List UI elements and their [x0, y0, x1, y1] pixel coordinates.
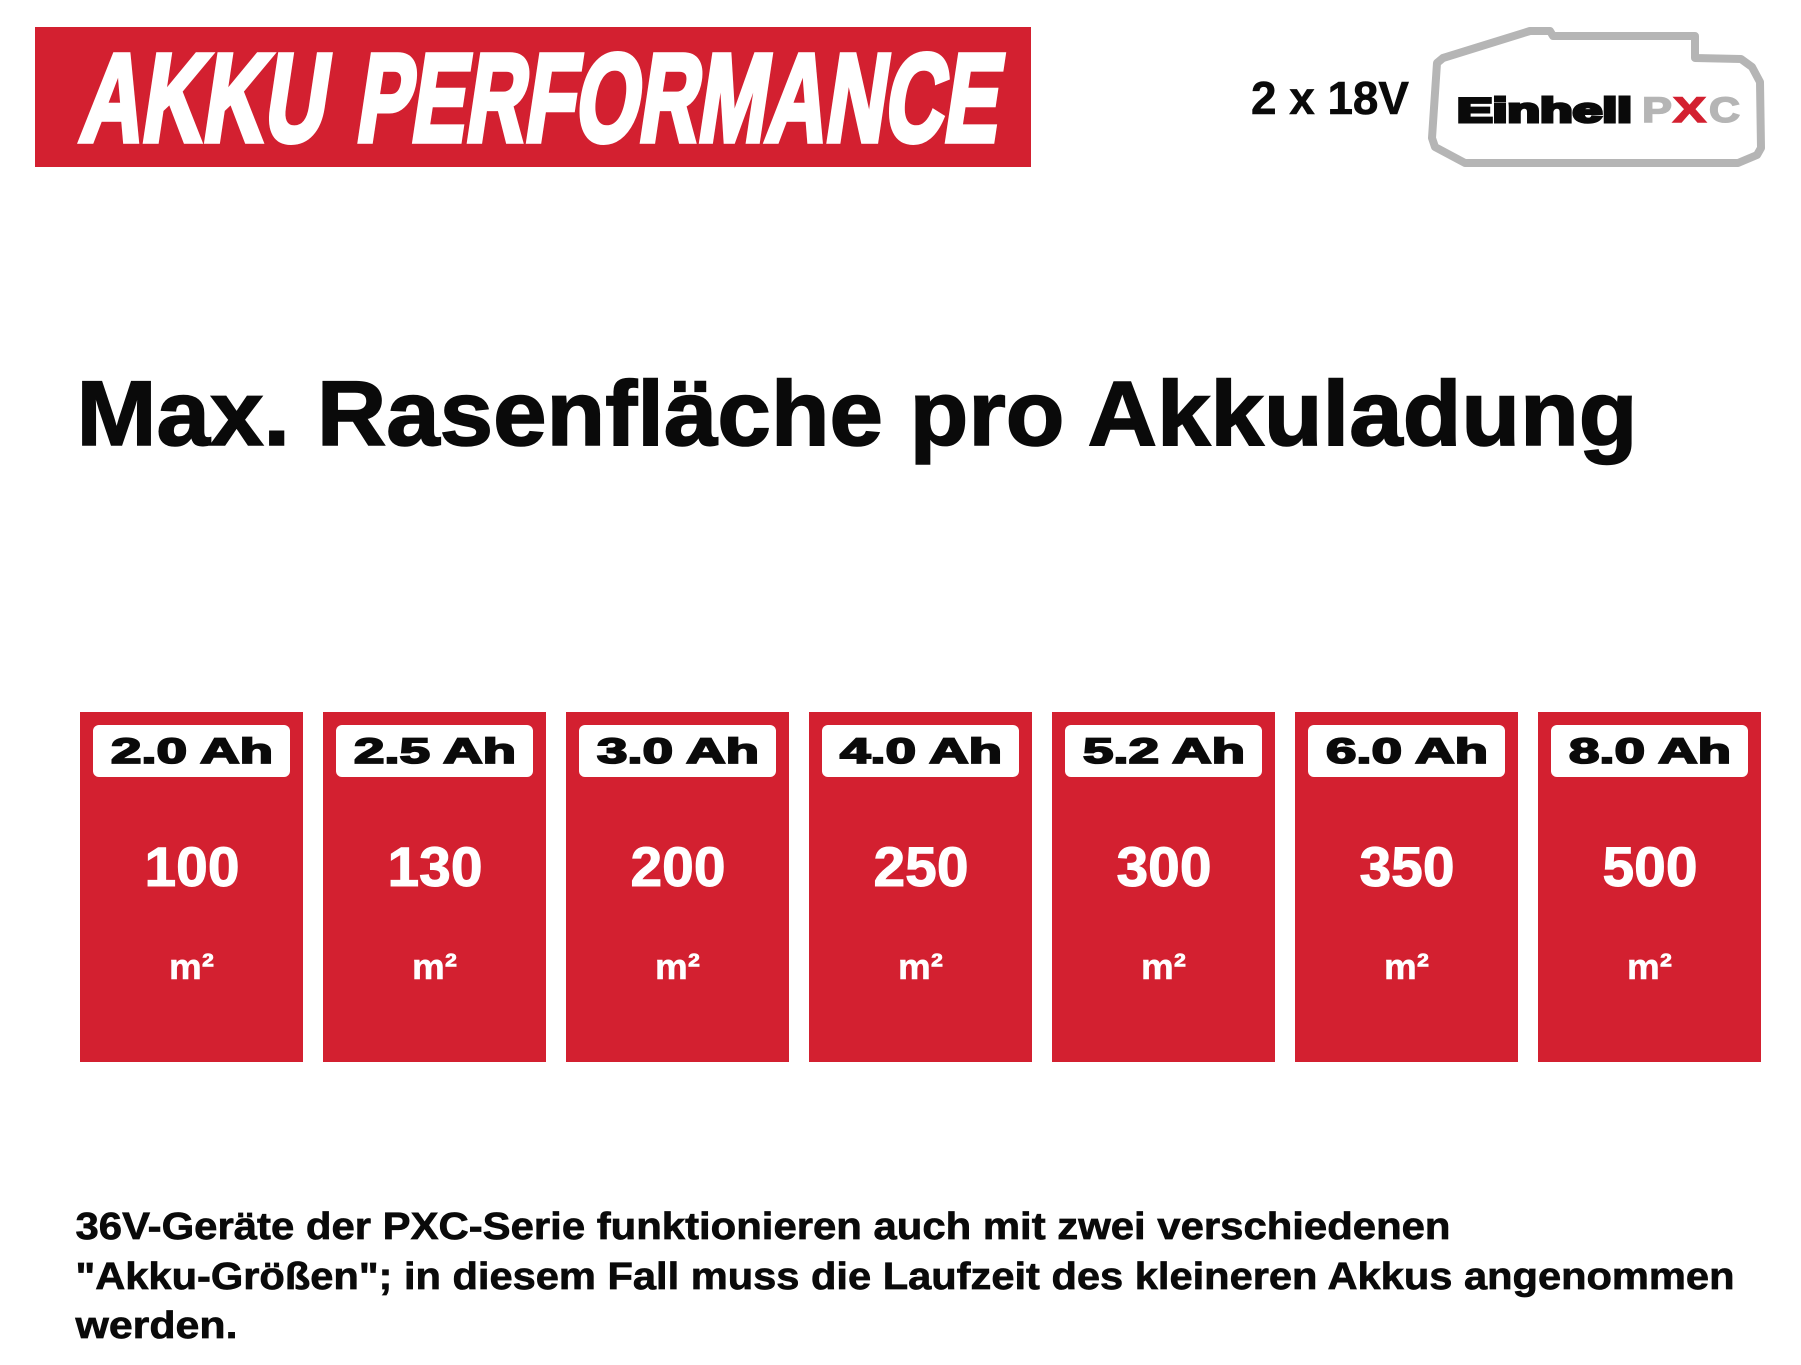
- voltage label: 2 x 18V: [1251, 72, 1409, 124]
- panel: battery cards: [80, 712, 1761, 1062]
- card: 3.0 Ah: 3.0 Ah: [597, 732, 759, 771]
- title banner: PERFORMANCE: [350, 28, 1013, 168]
- card: 2.5 Ah: 130: [388, 835, 482, 898]
- card: 8.0 Ah: 8.0 Ah: [1569, 732, 1731, 771]
- card: 2.0 Ah: 100: [144, 835, 240, 898]
- card: 6.0 Ah: 350: [1360, 835, 1454, 898]
- footnote text: 36V-Geräte der PXC-Serie funktionieren auch mit zwei verschiedenen: [76, 1206, 1450, 1248]
- icon: battery with Einhell PXC logo: C: [1709, 91, 1740, 130]
- card: 4.0 Ah: 250: [874, 835, 968, 898]
- title banner: [35, 27, 1031, 168]
- card: 8.0 Ah: m²: [1627, 946, 1672, 987]
- title banner: AKKU: [74, 28, 340, 168]
- card: 3.0 Ah: 200: [630, 835, 726, 898]
- card: 5.2 Ah: 5.2 Ah: [1083, 732, 1245, 771]
- card: 4.0 Ah: m²: [898, 946, 943, 987]
- card: 2.0 Ah: 2.0 Ah: [111, 732, 273, 771]
- card: 6.0 Ah: m²: [1384, 946, 1429, 987]
- card: 6.0 Ah: 6.0 Ah: [1326, 732, 1488, 771]
- card: 4.0 Ah: 4.0 Ah: [840, 732, 1002, 771]
- card: 2.5 Ah: [323, 712, 546, 1062]
- icon: battery with Einhell PXC logo: X: [1673, 91, 1707, 130]
- icon: battery with Einhell PXC logo: P: [1642, 91, 1672, 130]
- card: 4.0 Ah: [809, 712, 1032, 1062]
- footnote text: "Akku-Größen"; in diesem Fall muss die Laufzeit des kleineren Akkus angenommen: [76, 1256, 1735, 1298]
- card: 6.0 Ah: [1295, 712, 1518, 1062]
- card: 2.0 Ah: m²: [169, 946, 214, 987]
- card: 5.2 Ah: 300: [1116, 835, 1212, 898]
- icon: battery with Einhell PXC logo: Einhell: [1457, 92, 1632, 130]
- icon: battery with Einhell PXC logo: [1432, 31, 1761, 163]
- card: 2.5 Ah: m²: [412, 946, 457, 987]
- main heading: Max. Rasenfläche pro Akkuladung: [76, 363, 1638, 465]
- card: 3.0 Ah: [566, 712, 789, 1062]
- card: 2.0 Ah: [80, 712, 303, 1062]
- card: 3.0 Ah: m²: [655, 946, 700, 987]
- card: 2.5 Ah: 2.5 Ah: [354, 732, 516, 771]
- footnote text: [74, 1206, 1735, 1347]
- card: 8.0 Ah: [1538, 712, 1761, 1062]
- card: 5.2 Ah: [1052, 712, 1275, 1062]
- card: 5.2 Ah: m²: [1141, 946, 1186, 987]
- footnote text: werden.: [74, 1305, 237, 1347]
- card: 8.0 Ah: 500: [1602, 835, 1698, 898]
